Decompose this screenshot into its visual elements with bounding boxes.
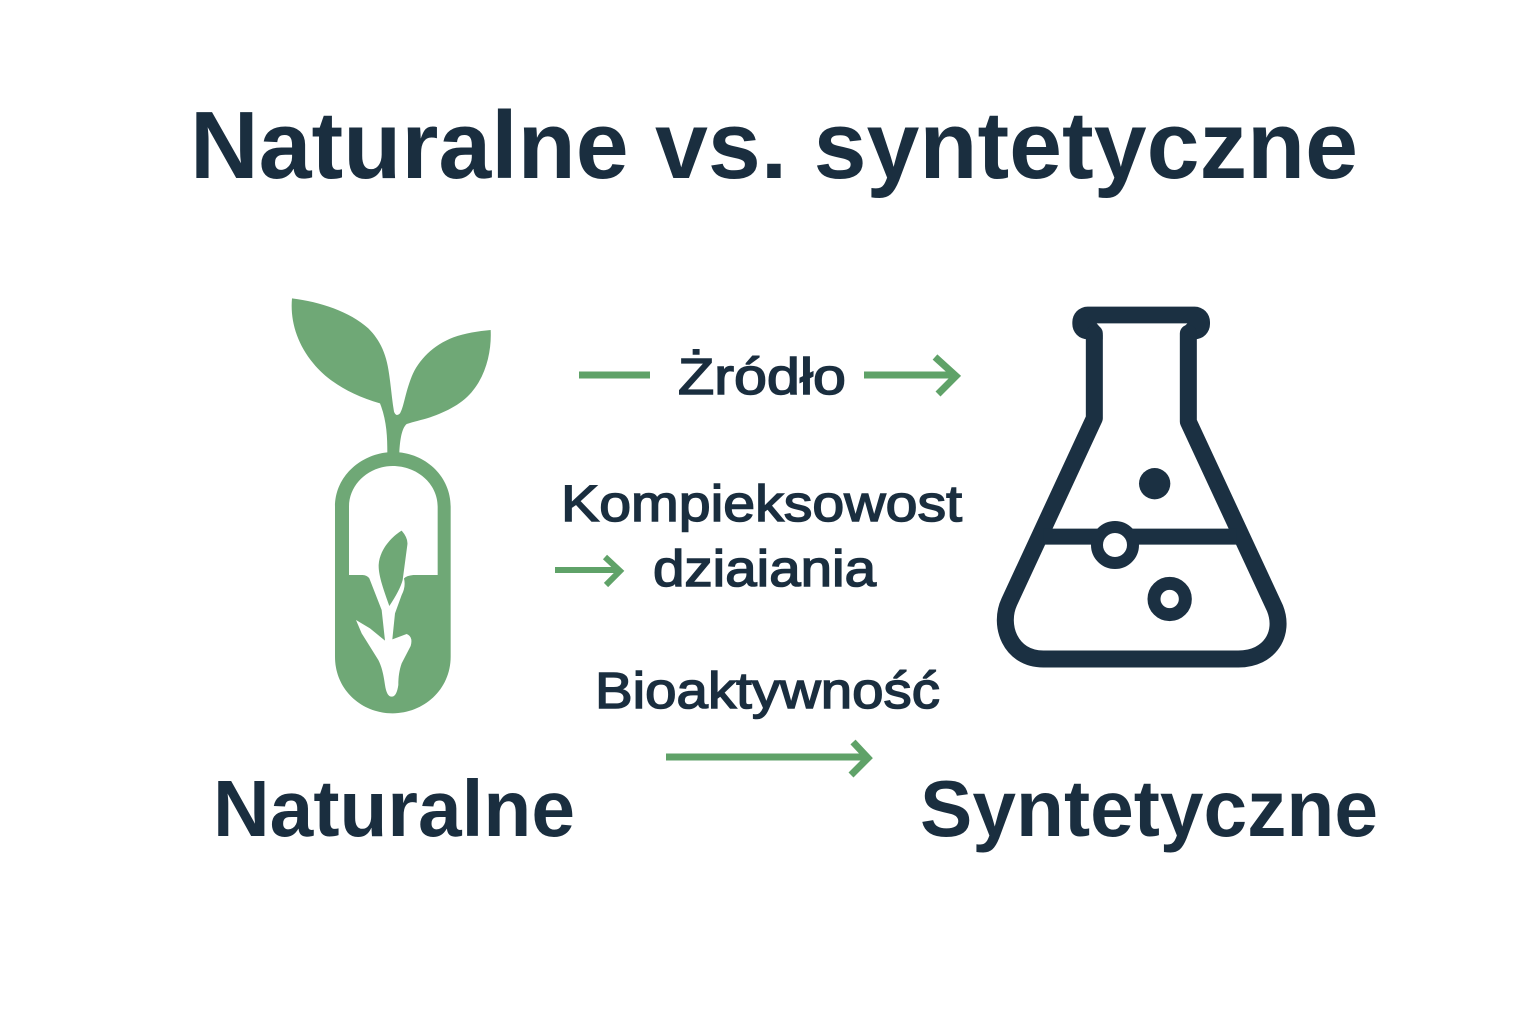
label: complexity of action: Kompieksowost <box>561 475 962 532</box>
label: bioactivity: Bioaktywność <box>595 662 940 719</box>
arrow: bioactivity <box>666 742 868 775</box>
label: source: Żródło <box>678 348 846 405</box>
label: complexity of action: dziaiania <box>653 540 877 597</box>
label: synthetic: Syntetyczne <box>920 764 1378 853</box>
icon: plant growing from capsule <box>292 298 491 713</box>
icon: laboratory flask <box>1005 307 1278 659</box>
arrow: complexity <box>555 557 620 585</box>
label: complexity of action <box>561 475 962 597</box>
title: Naturalne vs. syntetyczne <box>190 92 1358 199</box>
label: natural: Naturalne <box>213 764 575 853</box>
arrow: source, right segment <box>864 357 956 394</box>
arrow: source, left segment <box>579 372 650 378</box>
